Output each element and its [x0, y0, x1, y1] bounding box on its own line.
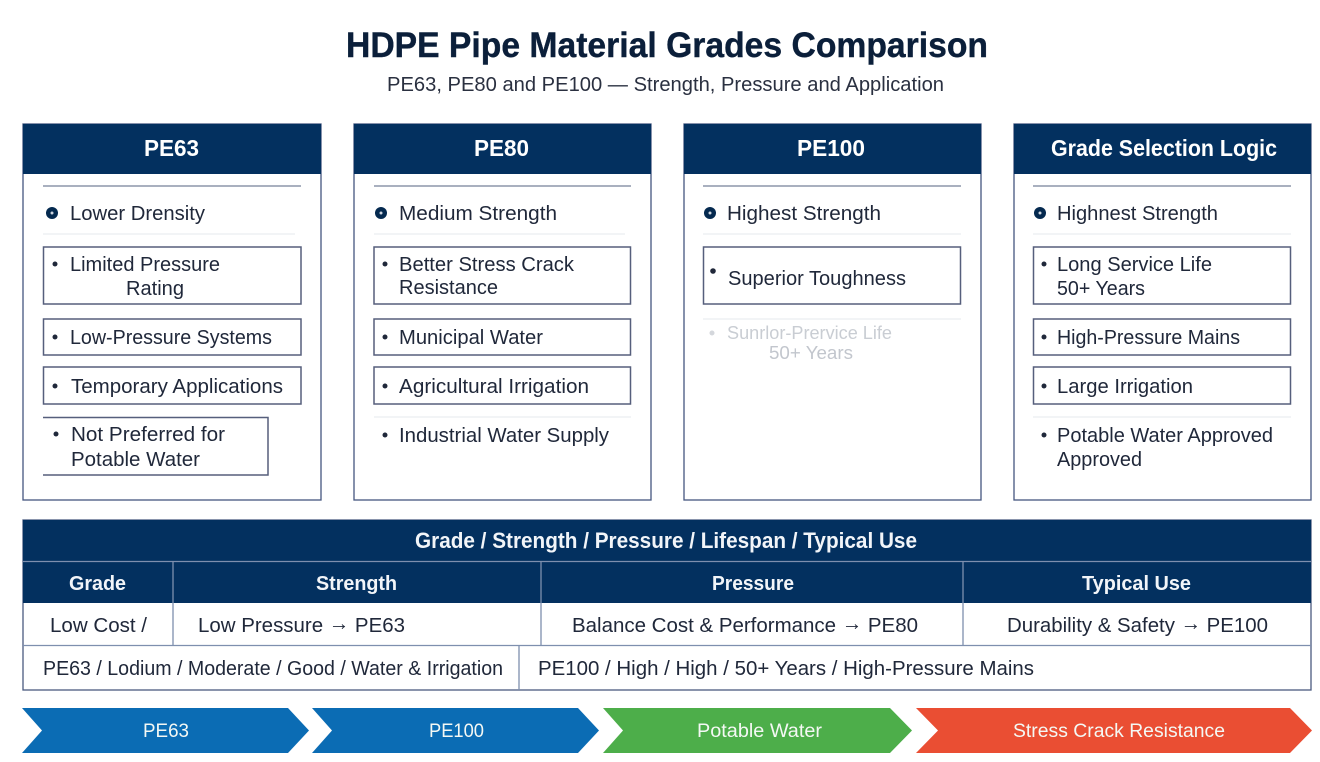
table row: selection: PE100 [1201, 615, 1268, 637]
table row: grades: PE100 / High / High / 50+ Years / High-Pressure Mains [538, 658, 1034, 680]
panel: PE63: Low-Pressure Systems [70, 327, 272, 349]
arrow: Stress Crack Resistance: Stress Crack Resistance [1013, 721, 1225, 742]
table header row [23, 562, 1311, 603]
table title bar [23, 520, 1311, 561]
arrow: PE100 [312, 708, 599, 753]
arrow: Potable Water: Potable Water [697, 721, 823, 742]
panel: PE100: Superior Toughness [728, 268, 906, 290]
panel: PE63 [23, 124, 321, 500]
arrow: PE63 [22, 708, 309, 753]
panel: Grade Selection Logic: Approved [1057, 449, 1142, 471]
table header row: Grade [69, 573, 126, 595]
panel: PE100 [684, 124, 981, 500]
panel: PE63: Lower Drensity [70, 203, 205, 225]
table title bar: Grade / Strength / Pressure / Lifespan / Typical Use [415, 528, 917, 553]
table row: selection [50, 613, 1268, 637]
panel: Grade Selection Logic: 50+ Years [1057, 278, 1145, 300]
subtitle: PE63, PE80 and PE100 — Strength, Pressure and Application [387, 74, 944, 96]
panel: PE100: Highest Strength [727, 203, 881, 225]
panel: Grade Selection Logic: Grade Selection Logic [1051, 135, 1277, 161]
table row: selection: Low Cost / [50, 615, 147, 637]
panel: PE63: PE63 [144, 135, 199, 161]
panel: PE63: Not Preferred for [71, 424, 225, 446]
table row: selection: → [842, 613, 862, 635]
panel: PE63: Temporary Applications [71, 376, 283, 398]
table row: selection: → [329, 613, 349, 635]
panel: Grade Selection Logic: Potable Water Approved [1057, 425, 1273, 447]
table row: selection: Balance Cost & Performance [572, 615, 830, 637]
panel: PE100: PE100 [797, 135, 865, 161]
table header row: Strength [316, 573, 397, 595]
panel: PE100: Sunrlor-Prervice Life [727, 323, 892, 343]
panel: Grade Selection Logic [1014, 124, 1311, 500]
table row: selection: PE80 [862, 615, 918, 637]
panel: PE80: Agricultural Irrigation [399, 376, 589, 398]
table row: selection: PE63 [349, 615, 405, 637]
table row: selection: Durability & Safety [1007, 615, 1172, 637]
panel: PE80 [354, 124, 651, 500]
panel: PE80: Better Stress Crack [399, 254, 575, 276]
table row: selection: Low Pressure [198, 615, 320, 637]
panel: Grade Selection Logic: Large Irrigation [1057, 376, 1193, 398]
table header row: Typical Use [1082, 573, 1191, 595]
table row: grades: PE63 / Lodium / Moderate / Good / Water & Irrigation [43, 658, 503, 680]
panel: PE80: Municipal Water [399, 327, 543, 349]
panel: PE100: 50+ Years [769, 343, 853, 363]
table row: selection: → [1181, 613, 1201, 635]
arrow: Potable Water [603, 708, 912, 753]
panel: PE63: Rating [126, 278, 184, 300]
arrow: PE100: PE100 [429, 721, 484, 742]
title: HDPE Pipe Material Grades Comparison [346, 26, 988, 65]
arrow: PE63: PE63 [143, 721, 189, 742]
panel: PE63: Potable Water [71, 449, 200, 471]
comparison table [23, 520, 1311, 690]
panel: Grade Selection Logic: Highnest Strength [1057, 203, 1218, 225]
panel: PE80: Industrial Water Supply [399, 425, 609, 447]
panel: Grade Selection Logic: High-Pressure Mains [1057, 327, 1240, 349]
panel: Grade Selection Logic: Long Service Life [1057, 254, 1212, 276]
table header row: Pressure [712, 573, 794, 595]
panel: PE80: PE80 [474, 135, 529, 161]
panel: PE80: Medium Strength [399, 203, 557, 225]
arrow: Stress Crack Resistance [916, 708, 1312, 753]
table row: grades [43, 658, 1034, 680]
panel: PE80: Resistance [399, 277, 498, 299]
panel: PE63: Limited Pressure [70, 254, 220, 276]
